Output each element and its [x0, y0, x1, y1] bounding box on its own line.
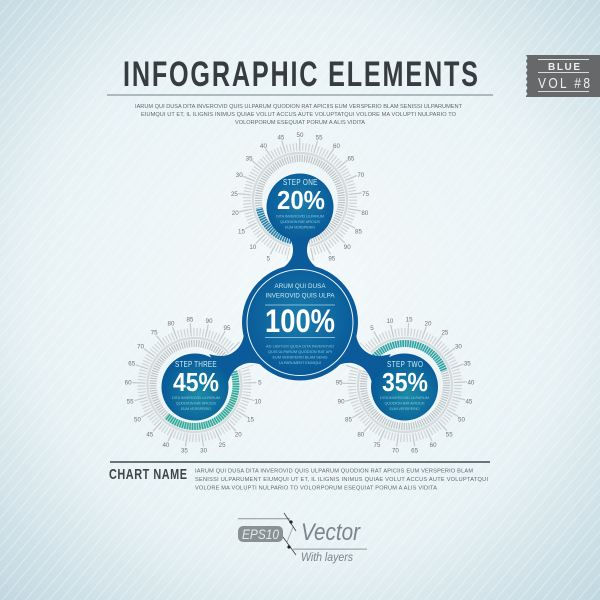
scale numbers: 30: [236, 172, 243, 179]
title: INFOGRAPHIC ELEMENTS: [123, 55, 478, 94]
scale numbers: 60: [125, 380, 132, 386]
scale numbers: 85: [345, 416, 352, 424]
step two disc: DITA INVEROVID ULPARUM: [380, 395, 429, 400]
hub body: EUM VERSPERIO BLAM SENIS: [272, 354, 328, 360]
chart description: IARUM QUI DUSA DITA INVEROVID QUIS ULPARUM QUODION RAT APICIIS EUM VERSPERIO BLAM: [195, 468, 473, 474]
scale numbers: 25: [231, 191, 238, 198]
scale numbers: 55: [127, 399, 134, 406]
central hub: INVEROVID QUIS ULPA: [266, 292, 335, 300]
scale numbers: 30: [455, 344, 462, 350]
scale numbers: 80: [357, 431, 365, 438]
step one disc: DITA INVEROVID ULPARUM: [276, 214, 324, 218]
scale numbers: 10: [254, 399, 262, 406]
step two disc: STEP TWO: [387, 359, 423, 369]
scale numbers: 80: [168, 320, 175, 327]
scale numbers: 5: [258, 380, 262, 386]
scale numbers: 70: [137, 344, 145, 350]
scale numbers: 85: [355, 228, 362, 235]
intro text: IARUM QUI DUSA DITA INVEROVID QUIS ULPARUM QUODION RAT APICIIS EUM VERSPERIO BLAM SENISSI ULPARUMENT: [135, 104, 463, 110]
scale numbers: 90: [338, 399, 345, 406]
scale numbers: 60: [430, 442, 437, 449]
vector badge: [238, 513, 367, 564]
scale numbers: [336, 316, 475, 455]
step one disc: EUM VERSPERIO: [285, 224, 315, 230]
scale numbers: 15: [406, 316, 413, 323]
scale numbers: [231, 132, 370, 263]
scale numbers: 35: [181, 448, 188, 455]
hub heading: ARUM QUI DUSA: [274, 283, 326, 290]
scale numbers: 55: [446, 431, 453, 438]
chart description: SENISSI ULPARUMENT EIUMQUI UT ET, IL ILIGNIS INIMUS QUIAE VOLUT ACCUS AUTE VOLUPTATQUI: [195, 477, 488, 483]
step one disc: QUODION RAT APICIUS: [280, 219, 320, 224]
scale numbers: 40: [467, 380, 475, 386]
hub body: AD LIBITUM QUSA DITA INVEROVID: [266, 344, 334, 348]
scale numbers: 20: [235, 431, 242, 438]
scale numbers: 85: [186, 316, 194, 323]
scale numbers: 90: [344, 244, 351, 251]
scale numbers: 95: [224, 325, 231, 332]
chart name: CHART NAME: [109, 465, 187, 482]
step two disc: 35%: [382, 367, 428, 397]
scale numbers: 65: [347, 156, 355, 163]
scale numbers: 15: [238, 228, 245, 235]
scale numbers: 20: [232, 210, 239, 217]
scale numbers: 20: [425, 320, 432, 327]
scale numbers: 10: [249, 244, 257, 251]
scale numbers: 65: [411, 448, 419, 455]
scale numbers: 10: [386, 318, 394, 325]
scale ticks: [330, 309, 481, 461]
scale numbers: [125, 316, 262, 455]
step one disc: [266, 174, 334, 240]
volume tag: VOL #8: [538, 75, 590, 91]
scale numbers: 45: [277, 135, 285, 142]
step three disc: DITA INVEROVID ULPARUM: [172, 395, 220, 400]
step three disc: EUM VERSPERIO: [181, 406, 211, 411]
step one disc: STEP ONE: [283, 177, 318, 187]
scale numbers: 90: [206, 318, 213, 325]
chart description: [195, 468, 488, 492]
intro text: VOLORPORUM ESEQUIAT PORUM A ALIS VIDITA: [235, 120, 365, 126]
scale numbers: 75: [373, 442, 381, 449]
vector badge: Vector: [301, 519, 361, 546]
gauge: step three: [118, 309, 270, 461]
hub body: ULPARUMENT EIUMQUI: [279, 360, 321, 365]
scale numbers: 60: [333, 143, 340, 150]
scale numbers: 30: [200, 448, 208, 455]
scale numbers: 50: [458, 416, 465, 424]
volume tag: [526, 55, 600, 97]
scale numbers: 40: [260, 143, 267, 150]
scale numbers: 50: [134, 416, 141, 424]
scale numbers: 65: [128, 361, 136, 368]
hub body: QUIS ULPARUM QUODION RAT API: [268, 349, 332, 354]
vector badge: EPS10: [242, 526, 279, 542]
scale numbers: 5: [370, 325, 374, 332]
step three disc: QUODION RAT APICIUS: [176, 400, 216, 406]
step two disc: QUODION RAT APICIUS: [384, 400, 425, 406]
scale numbers: 45: [146, 431, 154, 438]
volume tag: BLUE: [548, 62, 580, 73]
scale numbers: 50: [297, 132, 304, 139]
scale numbers: 35: [464, 361, 471, 368]
step three disc: STEP THREE: [175, 359, 217, 369]
scale numbers: 75: [362, 191, 370, 198]
scale numbers: 55: [316, 135, 323, 142]
step two disc: EUM VERSPERIO: [390, 406, 420, 411]
scale ticks: [118, 309, 270, 461]
step two disc: [371, 354, 438, 420]
intro text: EIUMQUI UT ET, IL ILIGNIS INIMUS QUIAE VOLUT ACCUS AUTE VOLUPTATQUI VOLORE MA VOLUPTI NULPARIO TO: [141, 112, 457, 118]
scale numbers: 95: [336, 380, 343, 386]
scale numbers: 95: [328, 256, 336, 263]
gauge: step one: [231, 132, 370, 263]
scale numbers: 15: [247, 416, 254, 424]
scale numbers: 35: [246, 156, 253, 163]
intro text: [135, 104, 463, 126]
step three disc: 45%: [173, 367, 219, 397]
scale numbers: 70: [357, 172, 365, 179]
gauge: step two: [330, 309, 481, 461]
step three disc: [162, 354, 228, 420]
central hub: [242, 264, 358, 380]
hub percentage: 100%: [265, 303, 335, 339]
scale numbers: 75: [151, 330, 158, 337]
chart description: VOLORE MA VOLUPTI NULPARIO TO VOLORPORUM ESEQUIAT PORUM A ALIS VIDITA: [195, 486, 437, 492]
vector badge: With layers: [301, 550, 353, 564]
scale ticks: [244, 144, 356, 254]
connector necks: [204, 232, 396, 394]
scale numbers: 70: [392, 448, 399, 455]
scale numbers: 80: [361, 210, 369, 217]
scale numbers: 45: [465, 399, 473, 406]
scale numbers: 25: [441, 330, 449, 337]
scale numbers: 40: [162, 442, 170, 449]
step one disc: 20%: [277, 185, 325, 215]
scale numbers: 5: [266, 256, 270, 263]
hub body: [266, 344, 334, 365]
scale numbers: 25: [219, 442, 226, 449]
